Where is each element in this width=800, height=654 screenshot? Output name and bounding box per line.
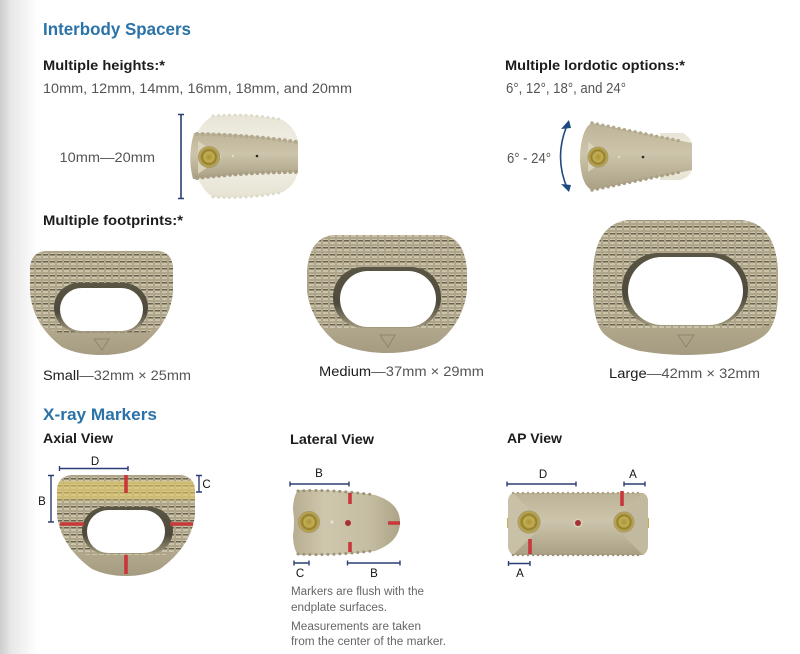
note: markers and measurements bbox=[291, 586, 446, 648]
dimensions: lateral view: C bbox=[296, 568, 304, 580]
text block: multiple heights: Multiple heights:* bbox=[43, 57, 166, 73]
arrow: lordotic curved double arrow bbox=[560, 120, 571, 192]
heading: multiple footprints: Multiple footprints:* bbox=[43, 212, 184, 228]
caption: medium: Medium —37mm × 29mm bbox=[319, 364, 484, 379]
caption: small: Small—32mm × 25mm bbox=[43, 368, 191, 383]
red markers: axial bbox=[60, 475, 193, 574]
label: height range: 10mm—20mm bbox=[60, 150, 155, 165]
dimensions: lateral view: B bbox=[315, 468, 323, 480]
dimensions: AP view: D bbox=[539, 469, 547, 481]
implant: lordotic wedge bbox=[580, 123, 692, 190]
dimensions: lateral view: B bbox=[370, 568, 378, 580]
dimensions: axial view bbox=[38, 456, 211, 522]
implant: height side view bbox=[190, 115, 298, 197]
heading: axial view: Axial View bbox=[43, 430, 113, 446]
caption: large: Large—42mm × 32mm bbox=[609, 366, 760, 381]
dimensions: AP view bbox=[507, 469, 645, 580]
implant: axial view with markers bbox=[57, 475, 195, 577]
dimensions: axial view: B bbox=[38, 496, 46, 508]
dimensions: axial view: D bbox=[91, 456, 99, 468]
text block: multiple lordotic options: Multiple lordotic options:* bbox=[505, 57, 686, 73]
note: markers and measurements: endplate surfaces. bbox=[291, 602, 387, 614]
red markers: AP bbox=[530, 491, 622, 554]
heading: lateral view: Lateral View bbox=[290, 431, 374, 447]
note: markers and measurements: from the center of the marker. bbox=[291, 636, 446, 648]
implant: small footprint bbox=[30, 250, 173, 356]
text block: multiple lordotic options: 6°, 12°, 18°, and 24° bbox=[506, 81, 626, 97]
red markers: lateral bbox=[345, 493, 400, 552]
note: markers and measurements: Markers are flush with the bbox=[291, 586, 424, 598]
text block: multiple heights: 10mm, 12mm, 14mm, 16mm, 18mm, and 20mm bbox=[43, 81, 352, 96]
implant: AP view with markers bbox=[507, 491, 649, 555]
heading: X-ray Markers: X-ray Markers bbox=[43, 406, 157, 424]
dimensions: lateral view bbox=[290, 468, 400, 580]
heading: AP view: AP View bbox=[507, 430, 562, 446]
text block: multiple lordotic options bbox=[505, 57, 686, 97]
arrow: height range bar bbox=[178, 114, 184, 198]
implant: large footprint bbox=[593, 220, 778, 356]
heading: Interbody Spacers: Interbody Spacers bbox=[43, 19, 191, 39]
left page shadow bbox=[0, 0, 38, 654]
implant: lateral view with markers bbox=[293, 490, 400, 555]
note: markers and measurements: Measurements are taken bbox=[291, 621, 421, 633]
dimensions: AP view: A bbox=[516, 568, 524, 580]
dimensions: AP view: A bbox=[629, 469, 637, 481]
label: lordotic range: 6° - 24° bbox=[507, 151, 551, 167]
text block: multiple heights bbox=[43, 57, 352, 96]
implant: medium footprint bbox=[307, 235, 467, 354]
dimensions: axial view: C bbox=[202, 479, 211, 491]
